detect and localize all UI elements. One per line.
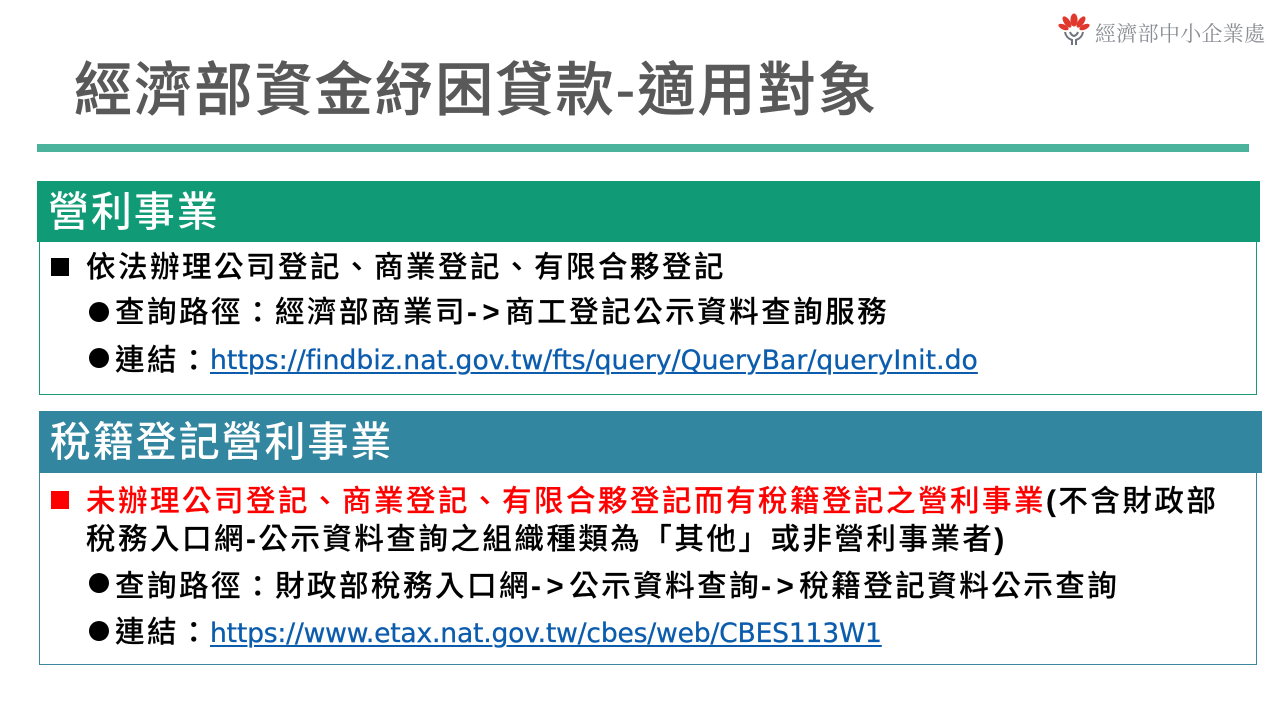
heading: for-profit business: 營利事業 [48,189,220,235]
panel: for-profit business [37,181,1260,395]
title: 經濟部資金紓困貸款-適用對象 [74,58,878,123]
sub-bullet: link: https://findbiz.nat.gov.tw/fts/query/QueryBar/queryInit.do [210,345,978,376]
sub-bullet: query path: 查詢路徑：財政部稅務入口網->公示資料查詢->稅籍登記資料公示查詢 [115,570,1119,604]
bullet: eligibility in red: 未辦理公司登記、商業登記、有限合夥登記而有稅籍登記之營利事業(不含財政部 [86,485,1218,518]
sub-bullet: query path: 查詢路徑：經濟部商業司->商工登記公示資料查詢服務 [115,296,889,330]
sub-bullet: link: 連結： [115,344,211,378]
panel body: for-profit business [39,231,1257,395]
heading: tax-registered business [39,411,1262,473]
heading: for-profit business [37,181,1260,242]
sub-bullet: link: https://www.etax.nat.gov.tw/cbes/web/CBES113W1 [210,618,882,649]
heading: tax-registered business: 稅籍登記營利事業 [50,419,393,465]
bullet: registration requirement: 依法辦理公司登記、商業登記、有限合夥登記 [86,251,726,284]
logo: SME Administration: 經濟部中小企業處 [1095,22,1265,46]
panel body: tax-registered business [39,471,1257,665]
sub-bullet: link: 連結： [115,616,211,650]
bullet: eligibility in red: 稅務入口網-公示資料查詢之組織種類為「其他」或非營利事業者) [86,523,1007,556]
logo: SME Administration [1058,14,1265,46]
bullet: eligibility in red [51,485,1218,556]
panel: tax-registered business [39,411,1262,665]
title rule [37,144,1249,152]
